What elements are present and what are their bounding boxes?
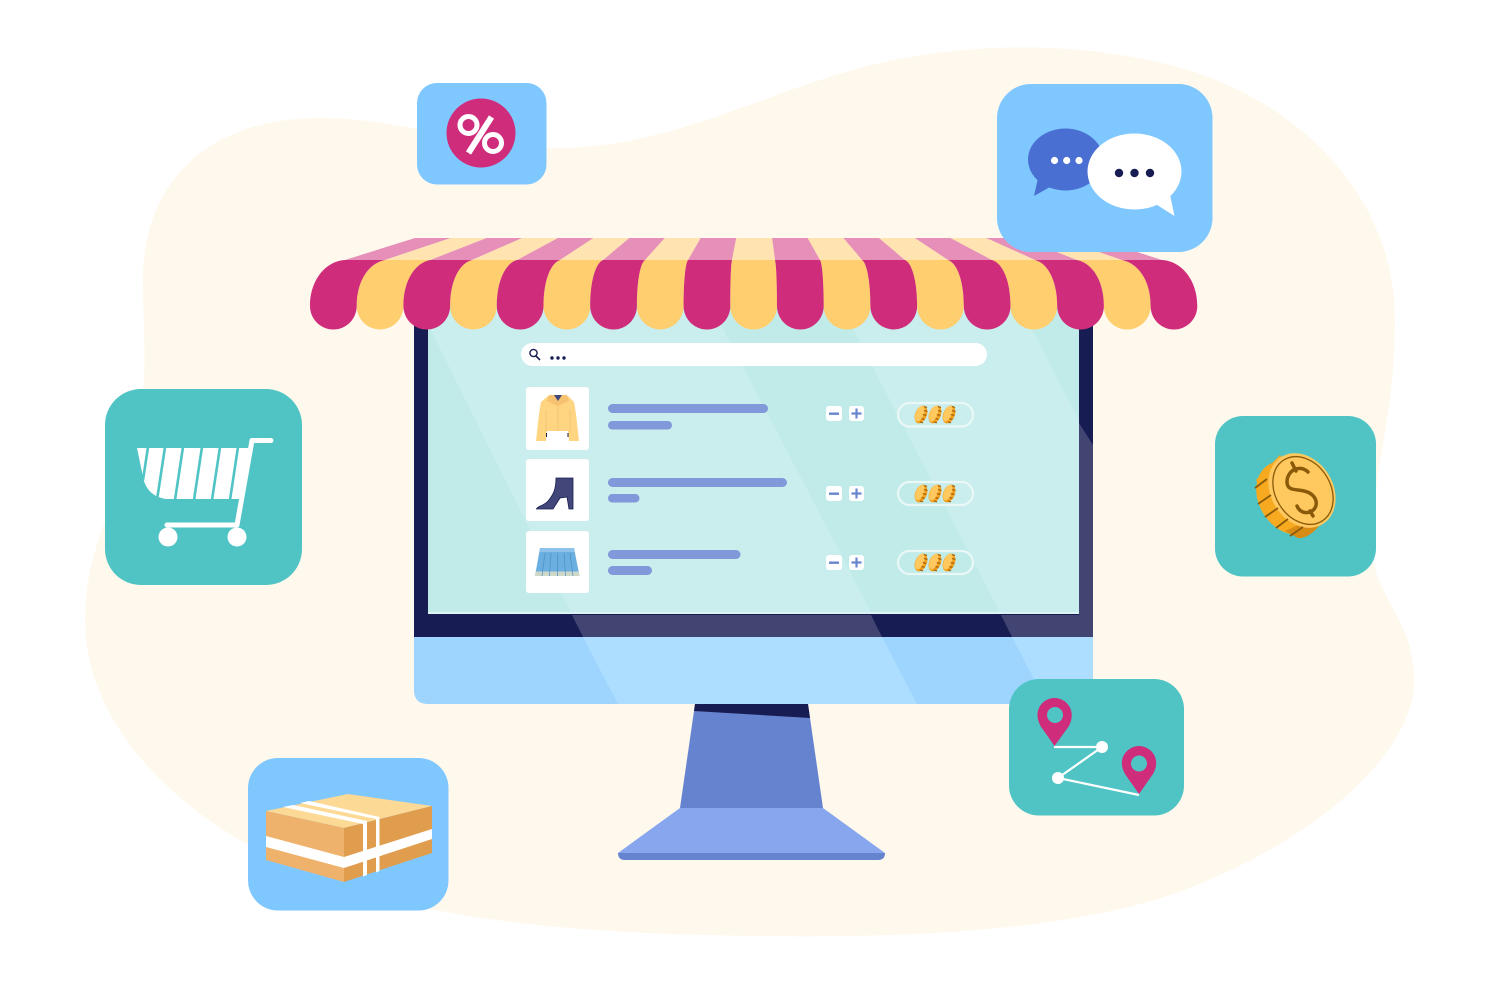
background blob xyxy=(85,47,1414,936)
map pin 1 xyxy=(1037,698,1072,746)
subtitle bar xyxy=(608,421,672,430)
icon: skirt xyxy=(535,548,580,576)
subtitle bar xyxy=(608,566,652,575)
icon: magnifier xyxy=(530,349,540,360)
minus button xyxy=(826,555,842,570)
cart xyxy=(137,440,271,546)
mini coins xyxy=(912,552,958,573)
icon tile: chat bubbles xyxy=(997,84,1212,252)
subtitle bar xyxy=(608,494,640,502)
awning top cream stripes xyxy=(385,238,1122,260)
monitor stand xyxy=(618,704,885,860)
coin xyxy=(1243,441,1349,547)
awning magenta scallops xyxy=(310,260,1197,330)
plus button xyxy=(849,486,864,501)
percent sign xyxy=(460,116,502,153)
product row 1: jacket xyxy=(526,387,973,450)
monitor xyxy=(414,300,1093,704)
icon tile: shopping cart xyxy=(105,389,302,585)
plus button xyxy=(849,406,864,421)
awning top pink stripes xyxy=(345,238,1162,260)
minus button xyxy=(826,486,842,501)
search placeholder dots xyxy=(550,356,566,360)
price pill xyxy=(898,482,973,505)
illustration: online shop on a desktop monitor xyxy=(85,48,1414,936)
monitor screen xyxy=(428,300,1079,614)
icon tile: percent discount xyxy=(417,83,546,184)
mini coins xyxy=(912,404,958,425)
product row 2: boot xyxy=(526,459,973,521)
price pill xyxy=(898,551,973,574)
awning xyxy=(310,238,1197,330)
title bar xyxy=(608,404,768,413)
icon tile: delivery route xyxy=(1009,679,1184,816)
icon tile: dollar coin xyxy=(1215,416,1376,576)
minus button xyxy=(826,406,842,421)
icon: boot xyxy=(536,478,573,509)
route path xyxy=(1052,741,1139,795)
icon tile: parcel box xyxy=(248,758,448,910)
map pin 2 xyxy=(1122,746,1156,794)
monitor frame xyxy=(414,300,1093,704)
awning yellow scallops xyxy=(357,260,1151,330)
product row 3: skirt xyxy=(526,531,973,593)
title bar xyxy=(608,478,787,487)
mini coins xyxy=(912,483,958,504)
blue chat bubble xyxy=(1028,128,1103,196)
icon: jacket xyxy=(536,395,579,441)
plus button xyxy=(849,555,864,570)
parcel xyxy=(266,794,432,882)
search bar xyxy=(521,343,987,366)
title bar xyxy=(608,550,740,559)
white chat bubble xyxy=(1088,134,1182,216)
price pill xyxy=(898,403,973,426)
